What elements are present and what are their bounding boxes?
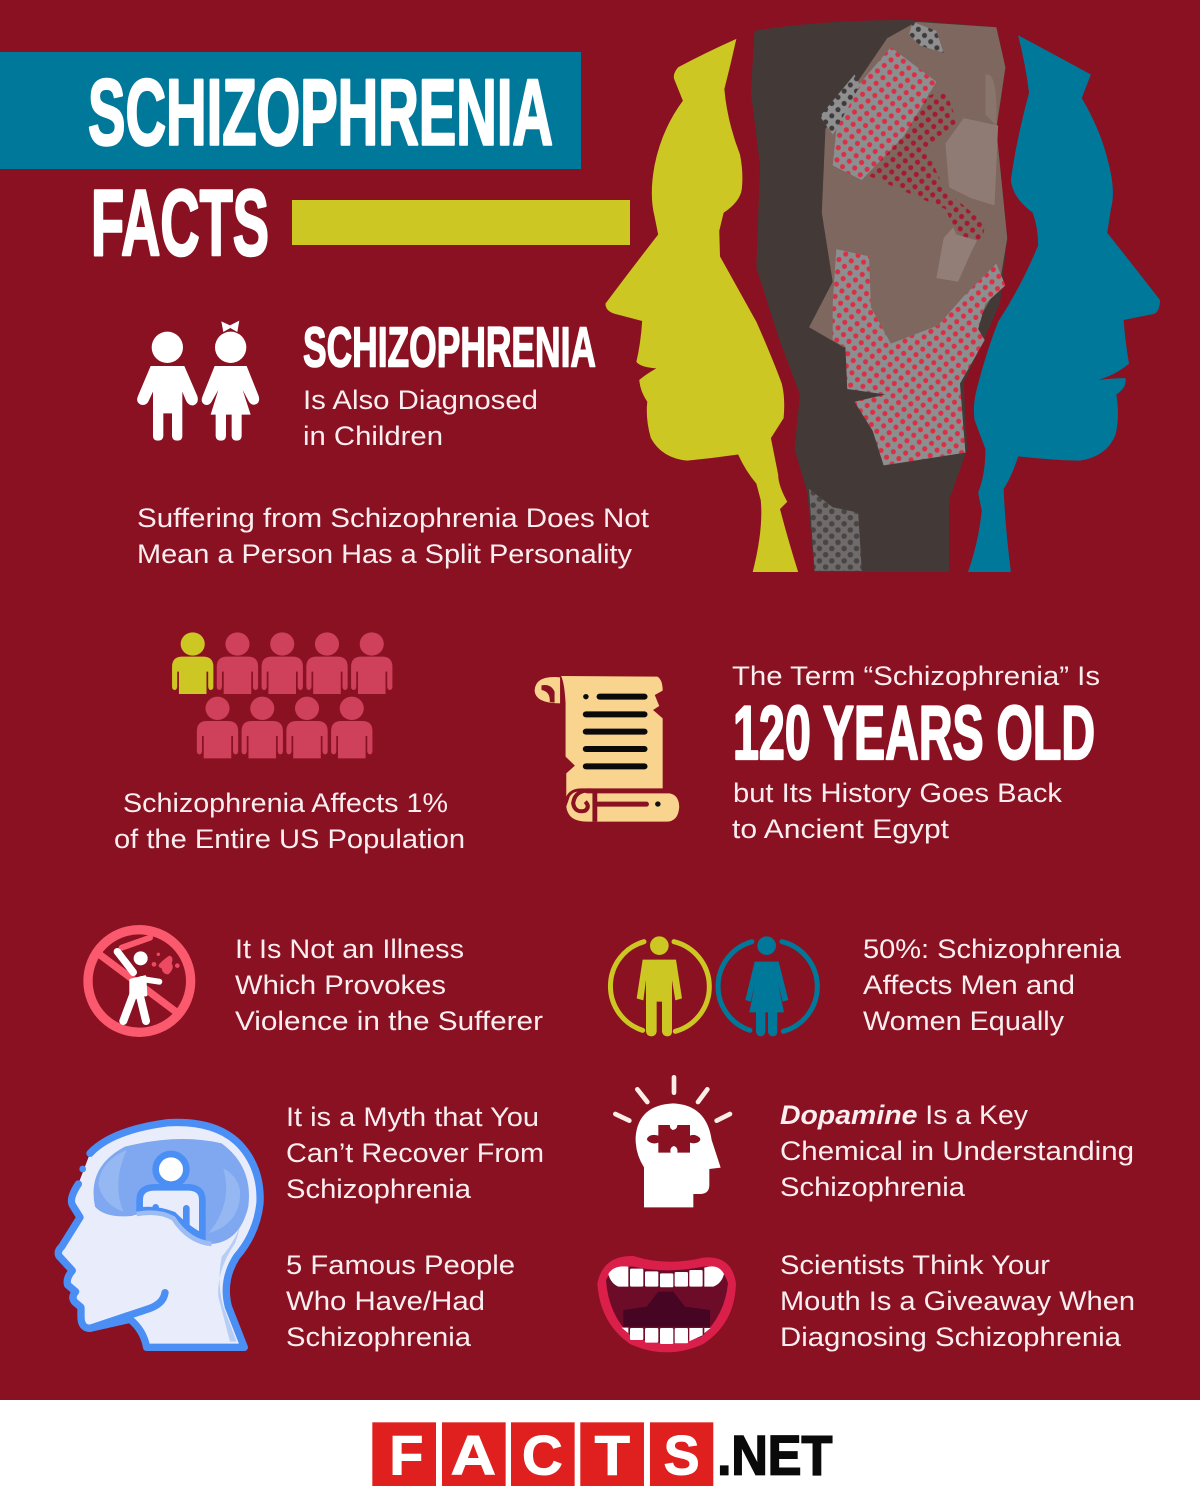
text: ancient egypt [732, 778, 1063, 844]
halftone dark dots [865, 89, 985, 242]
text: term is old: The Term “Schizophrenia” Is [732, 661, 1100, 691]
brown face [809, 22, 1007, 347]
logo: facts.net: A [451, 1424, 496, 1486]
text: recovery myth: It is a Myth that You [286, 1102, 539, 1132]
title: facts with bar: FACTS [91, 170, 269, 275]
dark neck [751, 20, 1007, 572]
boy [137, 332, 198, 441]
logo: facts.net: .NET [717, 1423, 832, 1486]
text: ancient egypt: to Ancient Egypt [732, 814, 950, 844]
icon: open mouth [597, 1256, 736, 1352]
text: also diagnosed in children: in Children [303, 421, 443, 451]
icon: boy and girl [137, 321, 259, 441]
text: mouth giveaway [780, 1250, 1135, 1352]
text: famous people: 5 Famous People [286, 1250, 515, 1280]
logo: facts.net: T [595, 1424, 630, 1486]
text: affects 1 percent: of the Entire US Population [114, 824, 465, 854]
text: dopamine [780, 1100, 1134, 1202]
logo: facts.net [372, 1422, 832, 1486]
icon: people 1 percent [172, 632, 392, 758]
halftone lower face [833, 249, 1005, 465]
title: facts with bar [91, 170, 630, 275]
halftone forehead dark edge [820, 75, 860, 135]
logo: facts.net: F [389, 1424, 423, 1486]
text: mouth giveaway: Mouth Is a Giveaway When [780, 1286, 1135, 1316]
footer [0, 1400, 1200, 1495]
icon: head with person [58, 1122, 260, 1347]
logo: facts.net: S [664, 1424, 700, 1486]
icon: no violence [88, 930, 191, 1032]
text: mouth giveaway: Diagnosing Schizophrenia [780, 1322, 1122, 1352]
text: split personality [137, 503, 650, 569]
text: dopamine: Dopamine Is a Key [780, 1100, 1029, 1130]
text: split personality: Mean a Person Has a Split Personality [137, 539, 633, 569]
heading: schizophrenia: SCHIZOPHRENIA [303, 316, 596, 380]
top halftone [909, 22, 944, 53]
text: also diagnosed in children: Is Also Diagnosed [303, 385, 538, 415]
girl [202, 321, 259, 441]
text: violence: It Is Not an Illness [235, 934, 464, 964]
title banner: SCHIZOPHRENIA [88, 60, 553, 164]
lighter face planes [945, 118, 998, 205]
yellow profile [605, 39, 798, 572]
text: mouth giveaway: Scientists Think Your [780, 1250, 1050, 1280]
text: men and women: Affects Men and [863, 970, 1075, 1000]
logo: facts.net: C [522, 1424, 563, 1486]
text: ancient egypt: but Its History Goes Back [733, 778, 1063, 808]
illustration: split faces [605, 20, 1160, 572]
blue profile [968, 35, 1160, 572]
text: affects 1 percent [114, 788, 465, 854]
text: also diagnosed in children [303, 385, 538, 451]
title banner [0, 52, 581, 169]
text: men and women: 50%: Schizophrenia [863, 934, 1122, 964]
halftone forehead [833, 47, 936, 180]
man [610, 936, 709, 1036]
text: men and women: Women Equally [863, 1006, 1065, 1036]
text: affects 1 percent: Schizophrenia Affects 1% [123, 788, 448, 818]
text: men and women [863, 934, 1122, 1036]
text: violence [235, 934, 543, 1036]
text: recovery myth: Schizophrenia [286, 1174, 472, 1204]
text: famous people: Schizophrenia [286, 1322, 472, 1352]
text: violence: Which Provokes [235, 970, 446, 1000]
icon: head with puzzle [615, 1077, 730, 1207]
text: violence: Violence in the Sufferer [235, 1006, 543, 1036]
icon: scroll [535, 676, 679, 822]
halftone neck [809, 489, 862, 571]
icon: man and woman [610, 936, 817, 1036]
text: famous people: Who Have/Had [286, 1286, 485, 1316]
text: famous people [286, 1250, 515, 1352]
text: dopamine: Schizophrenia [780, 1172, 966, 1202]
woman [718, 936, 817, 1036]
text: split personality: Suffering from Schizophrenia Does Not [137, 503, 650, 533]
text: dopamine: Chemical in Understanding [780, 1136, 1134, 1166]
text: recovery myth: Can’t Recover From [286, 1138, 544, 1168]
text: recovery myth [286, 1102, 544, 1204]
